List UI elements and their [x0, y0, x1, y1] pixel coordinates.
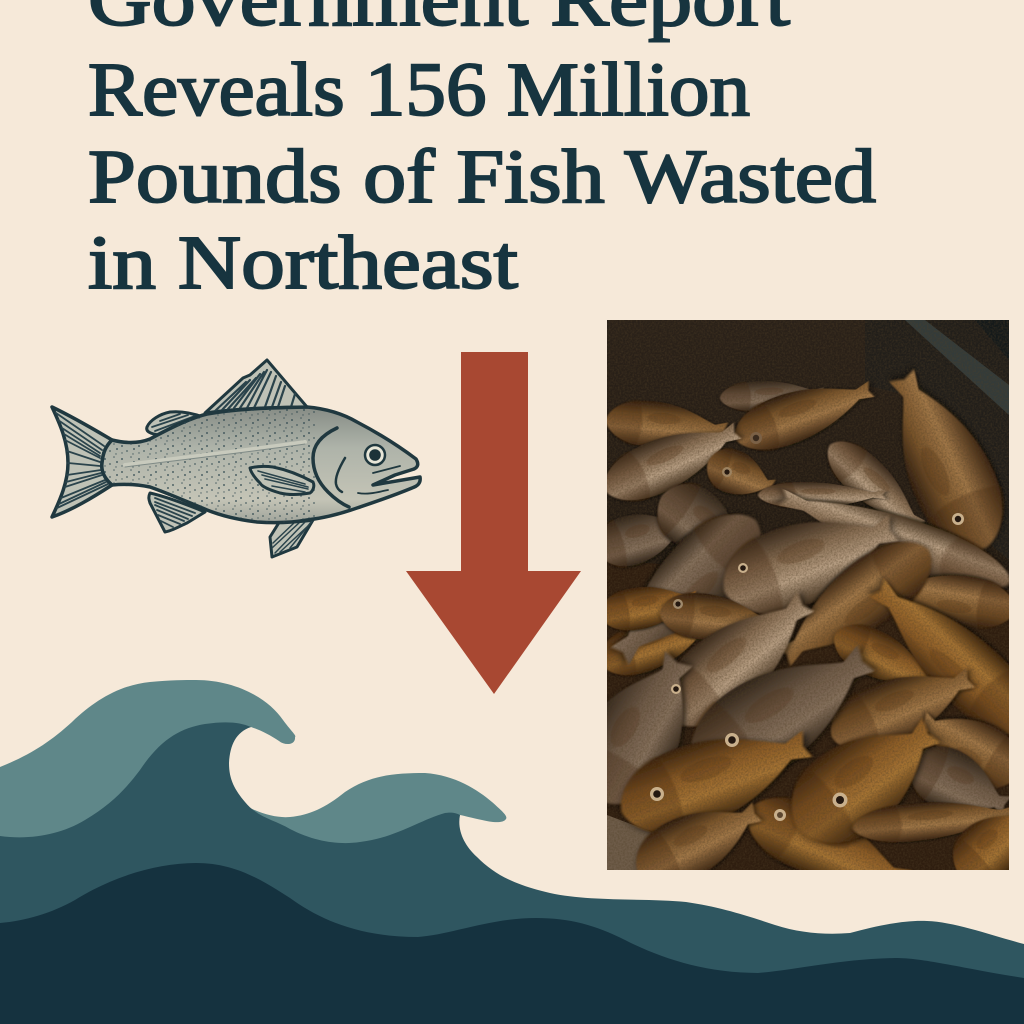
pectoral fin — [250, 466, 314, 494]
anal fin — [149, 493, 205, 532]
fish mouth line — [358, 466, 400, 494]
title: in Northeast — [88, 221, 518, 305]
photo: pile of dead fish — [607, 320, 1009, 870]
title: Reveals 156 Million — [88, 48, 750, 132]
title: Pounds of Fish Wasted — [88, 135, 876, 219]
fish body — [102, 407, 420, 523]
photo grain texture — [607, 320, 1009, 870]
cheek mark — [336, 458, 345, 492]
rear dorsal fin — [147, 412, 203, 435]
icon: engraved fish — [52, 360, 420, 557]
tail fin — [52, 407, 112, 517]
dorsal fin — [205, 360, 307, 413]
body speckles — [100, 405, 315, 525]
arrow: downward — [406, 352, 581, 694]
belly fin — [270, 520, 313, 557]
title — [88, 0, 876, 305]
fish eyes in photo — [650, 432, 964, 821]
fish eye — [365, 445, 385, 465]
wave: back light layer — [0, 680, 506, 860]
wave: front dark layer — [0, 863, 1024, 1024]
wave: middle layer — [0, 722, 1024, 1024]
gill cover — [313, 428, 349, 507]
